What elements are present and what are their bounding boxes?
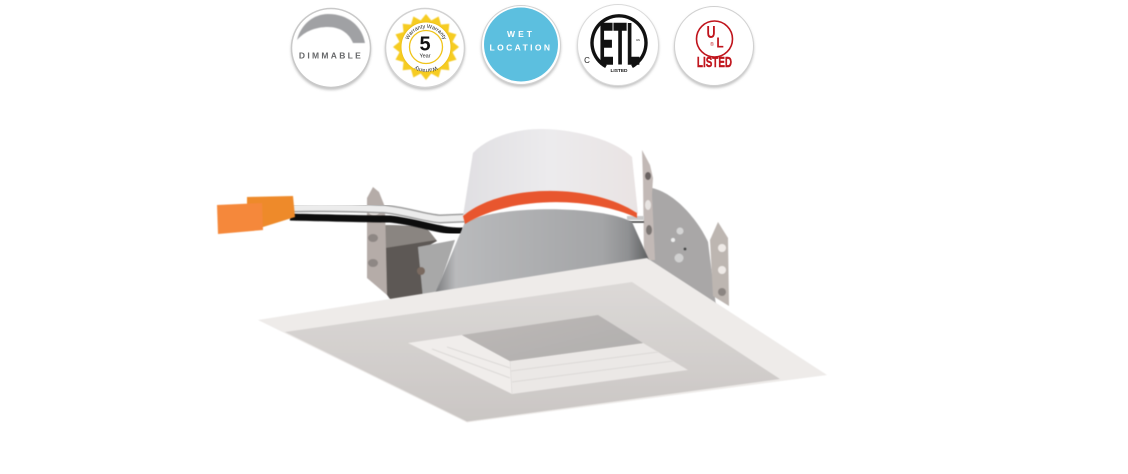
badge: 5 year warranty <box>384 8 466 92</box>
badge: 5 year warranty: 5 <box>419 34 431 56</box>
product photo: square LED downlight <box>217 129 827 422</box>
badge: ETL listed: C <box>584 56 590 65</box>
left mounting bracket <box>367 187 455 302</box>
badge: UL listed: ® <box>710 41 714 48</box>
badge: wet location: WET <box>507 29 535 39</box>
badge: dimmable <box>291 8 371 90</box>
badge: ETL listed <box>577 4 659 88</box>
badge: 5 year warranty: Year <box>419 54 431 60</box>
badge: ETL listed: ETL <box>599 12 640 77</box>
square trim plate <box>258 258 827 422</box>
badge: ETL listed: us <box>636 38 640 42</box>
wires <box>290 208 644 231</box>
stepped white baffle <box>408 335 512 394</box>
badge: UL listed <box>674 6 754 88</box>
badge: UL listed: U <box>706 23 716 43</box>
badge: wet location <box>481 6 561 87</box>
badge: ETL listed: LISTED <box>610 68 628 74</box>
badge: UL listed: LISTED <box>697 54 732 71</box>
badge: wet location: LOCATION <box>490 42 552 52</box>
white driver cap <box>463 129 638 216</box>
right mounting plate <box>642 150 729 306</box>
badge: UL listed: L <box>716 34 724 51</box>
baffle lower step <box>510 343 688 394</box>
badge: dimmable: DIMMABLE <box>299 50 363 60</box>
badge: 5 year warranty: Warranty <box>414 66 438 72</box>
LED lens <box>462 315 643 361</box>
orange band <box>463 191 637 224</box>
inner flat face <box>285 282 780 422</box>
orange connector <box>217 196 295 234</box>
badge: 5 year warranty: Warranty Warranty <box>405 24 446 39</box>
baffle step lines <box>432 347 673 382</box>
metal reflector cone <box>434 209 650 296</box>
